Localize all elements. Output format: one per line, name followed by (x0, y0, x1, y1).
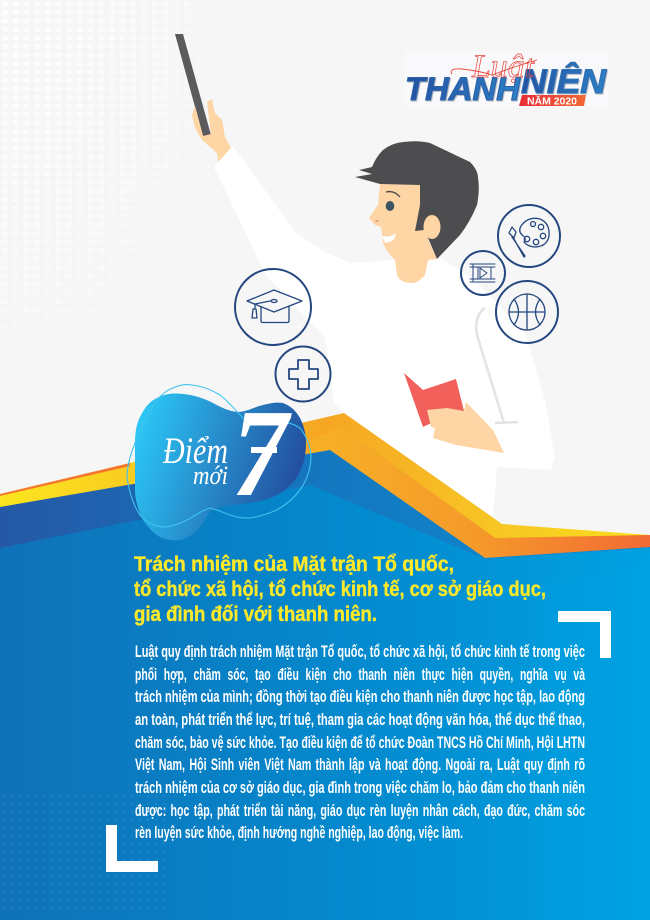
logo script swash (451, 60, 537, 75)
strap (476, 308, 518, 423)
white shirt (214, 146, 555, 517)
logo: Luật Thanh Niên: NĂM 2020 (527, 94, 577, 108)
holding hand (427, 402, 504, 453)
body text: rèn luyện sức khỏe, định hướng nghề nghiệp, lao động, việc làm. (135, 824, 463, 842)
badge: Điểm mới 7 (127, 385, 311, 540)
corner bracket top right (558, 611, 611, 658)
pointer stick (175, 34, 211, 136)
thin blob outline (127, 385, 311, 527)
ear (424, 215, 440, 239)
numeral 7: 7 (232, 385, 292, 523)
icon: medical cross (276, 346, 330, 402)
heading: gia đình đối với thanh niên. (134, 603, 377, 626)
red book (404, 373, 464, 427)
eyebrow (386, 192, 400, 197)
heading: tổ chức xã hội, tổ chức kinh tế, cơ sở giáo dục, (134, 578, 546, 601)
logo word THANH shadow: THANH (406, 72, 522, 108)
wave band: yellow and orange (0, 413, 650, 560)
faint dots lower left (0, 790, 170, 915)
blob shape (135, 393, 306, 540)
body text (135, 643, 586, 842)
illustration: teacher (175, 34, 555, 517)
panel: blue text background (0, 450, 650, 920)
logo year badge (519, 95, 586, 106)
eye (386, 201, 394, 211)
logo: Luật Thanh Niên (404, 49, 609, 108)
logo script word: Luật (471, 49, 535, 85)
neck and face (369, 184, 437, 283)
word mới: mới (193, 461, 228, 490)
word Điểm: Điểm (162, 431, 228, 472)
icon: palette and brush (498, 205, 560, 267)
icon: basketball (496, 281, 558, 343)
logo word NIÊN: NIÊN (521, 63, 608, 101)
halftone dots top left (0, 0, 290, 470)
heading: Trách nhiệm của Mặt trận Tổ quốc, (134, 553, 454, 576)
hair (355, 141, 479, 259)
corner bracket bottom left (106, 825, 158, 872)
icon: film strip (461, 251, 505, 295)
logo word THANH: THANH (405, 71, 521, 107)
nose tip (375, 220, 379, 222)
heading (134, 553, 546, 626)
icon: graduation cap (235, 269, 311, 345)
raised hand (192, 99, 231, 162)
numeral crossbar (251, 447, 277, 453)
smile (382, 233, 396, 243)
logo word NIÊN shadow: NIÊN (522, 64, 609, 102)
